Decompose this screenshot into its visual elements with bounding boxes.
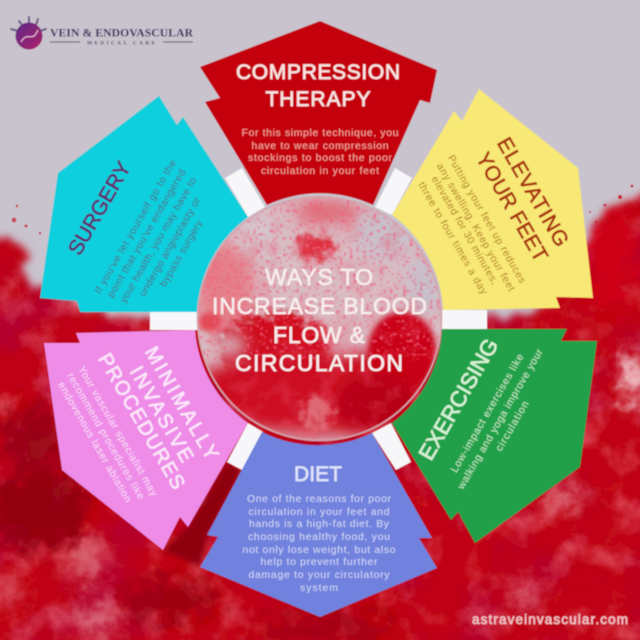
heading: PROCEDURES bbox=[93, 350, 189, 493]
panel: diet bbox=[200, 432, 437, 617]
panel shape bbox=[392, 89, 593, 310]
powder specks bbox=[12, 185, 633, 234]
body text: Your vascular specialist may bbox=[75, 365, 159, 499]
title: INCREASE BLOOD bbox=[212, 293, 427, 319]
heading: THERAPY bbox=[266, 88, 370, 111]
title: WAYS TO bbox=[265, 264, 373, 290]
connector bars bbox=[150, 168, 487, 470]
body text: help to prevent further bbox=[260, 557, 378, 568]
heading: SURGERY bbox=[64, 158, 136, 259]
heading bbox=[236, 61, 400, 111]
body text: not only lose weight, but also bbox=[242, 545, 396, 556]
title: FLOW & bbox=[273, 322, 365, 348]
body text: circulation bbox=[494, 399, 532, 453]
logo name: VEIN & ENDOVASCULAR bbox=[50, 26, 194, 40]
website url: astraveinvascular.com bbox=[472, 612, 628, 627]
heading: YOUR FEET bbox=[471, 149, 552, 266]
panel shape bbox=[40, 96, 248, 312]
body text: elevated for 30 minutes, bbox=[429, 174, 500, 287]
heading: DIET bbox=[294, 463, 342, 486]
panel: exercising bbox=[392, 329, 597, 543]
body text: Putting your feet up reduces bbox=[445, 154, 527, 285]
dark channel between panels bbox=[163, 462, 242, 567]
body text: endovenous laser ablation bbox=[55, 380, 133, 505]
logo bbox=[11, 17, 194, 50]
body text: choosing healthy food, you bbox=[248, 532, 390, 543]
body text: hands is a high-fat diet. By bbox=[249, 519, 390, 530]
body text: One of the reasons for poor bbox=[247, 494, 392, 505]
heading: COMPRESSION bbox=[236, 61, 400, 84]
body text bbox=[415, 154, 527, 297]
body text bbox=[242, 128, 399, 177]
body text: recommend procedures like bbox=[64, 371, 146, 502]
body text: point that you've endangered bbox=[106, 168, 189, 300]
body text: system bbox=[300, 583, 338, 594]
panel shape bbox=[200, 432, 437, 617]
body text: three to four times a day bbox=[415, 180, 489, 297]
body text: circulation in your feet and bbox=[248, 507, 390, 518]
panel shape bbox=[200, 21, 437, 205]
body text: Low-impact exercises like bbox=[449, 352, 526, 475]
body text: stockings to boost the poor bbox=[248, 153, 393, 164]
logo tagline: MEDICAL CARE bbox=[87, 40, 156, 46]
body text bbox=[242, 494, 396, 594]
title bbox=[212, 264, 427, 376]
body text: For this simple technique, you bbox=[242, 128, 399, 139]
heading: EXERCISING bbox=[414, 334, 503, 464]
body text: If you've let yourself go to the bbox=[93, 158, 179, 296]
circle texture bbox=[198, 196, 442, 440]
panel: surgery bbox=[40, 96, 248, 323]
heading: MINIMALLY bbox=[140, 343, 222, 464]
body text: bypass surgery bbox=[158, 218, 206, 289]
panel: elevating your feet bbox=[392, 89, 593, 310]
panel: minimally invasive procedures bbox=[44, 330, 248, 550]
center circle bbox=[190, 190, 450, 450]
body text: any swelling. Keep your feet bbox=[434, 162, 516, 294]
body text: have to wear compression bbox=[252, 141, 389, 152]
title: CIRCULATION bbox=[235, 350, 403, 376]
panel: compression therapy bbox=[200, 21, 437, 205]
body text: your health, you may have to bbox=[118, 176, 199, 305]
body text: circulation in your feet bbox=[261, 166, 379, 177]
panel shape bbox=[392, 329, 597, 543]
heading: ELEVATING bbox=[492, 134, 573, 251]
red powder cloud bbox=[0, 150, 640, 640]
body text bbox=[93, 158, 225, 323]
body text: undergo angioplasty or bbox=[138, 195, 204, 299]
logo icon bbox=[11, 17, 46, 50]
panel shape bbox=[44, 330, 248, 550]
body text: damage to your circulatory bbox=[248, 570, 390, 581]
heading: INVASIVE bbox=[125, 363, 197, 466]
body text: walking and yoga improve your bbox=[456, 347, 546, 492]
